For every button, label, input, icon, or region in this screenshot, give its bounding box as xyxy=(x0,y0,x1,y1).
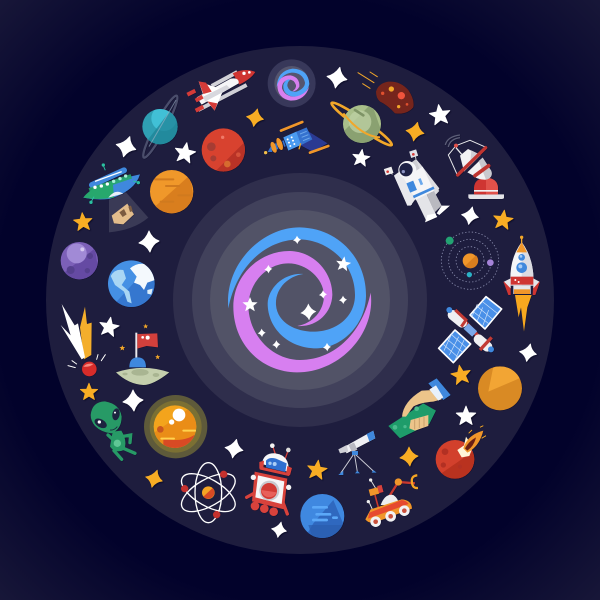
galaxy stars xyxy=(242,236,352,351)
icon: solar system xyxy=(441,232,499,289)
bottom icons xyxy=(176,431,377,540)
icon: UFO with cow beam xyxy=(83,163,148,232)
blue arm xyxy=(228,227,366,348)
right side icons xyxy=(388,232,540,483)
icon: ringed green planet xyxy=(330,101,394,147)
pink arm xyxy=(233,251,371,372)
icon: moon with flag xyxy=(116,324,169,385)
white stars xyxy=(98,65,539,539)
icon: atom xyxy=(176,463,241,523)
icon: purple planet xyxy=(61,242,100,282)
icon: robot xyxy=(247,443,292,516)
icon: astronaut xyxy=(384,149,450,222)
icon: alien xyxy=(91,401,135,459)
icon: asteroid xyxy=(376,82,414,114)
icon: earth xyxy=(108,260,155,308)
icon: handshake xyxy=(388,378,451,438)
left side icons xyxy=(61,242,207,459)
icon: moon rover xyxy=(365,475,418,527)
icon: space shuttle xyxy=(187,70,255,111)
panel: outer circle xyxy=(46,46,554,554)
icon: ray gun xyxy=(264,122,328,154)
icon: rocket xyxy=(503,236,540,332)
concentric rings xyxy=(173,173,427,427)
galaxy spiral xyxy=(228,227,371,372)
icon: sun with halo xyxy=(144,395,207,458)
icon: satellite xyxy=(439,297,502,363)
icon: radar dish xyxy=(445,135,504,199)
top-left planets xyxy=(139,59,316,217)
icon: meteor hitting planet xyxy=(436,426,486,483)
asteroid speed lines xyxy=(358,72,377,88)
icon: orange planet xyxy=(478,366,523,410)
icon: small galaxy xyxy=(268,59,316,107)
icon: comet xyxy=(61,304,105,376)
icon: red planet xyxy=(202,128,246,172)
icon: ringed teal planet xyxy=(142,94,179,160)
icon: orange planet xyxy=(150,170,194,214)
top-right icons xyxy=(329,72,414,149)
icon: blue planet xyxy=(300,494,345,538)
gold stars xyxy=(73,107,514,490)
icon: telescope xyxy=(338,431,377,475)
